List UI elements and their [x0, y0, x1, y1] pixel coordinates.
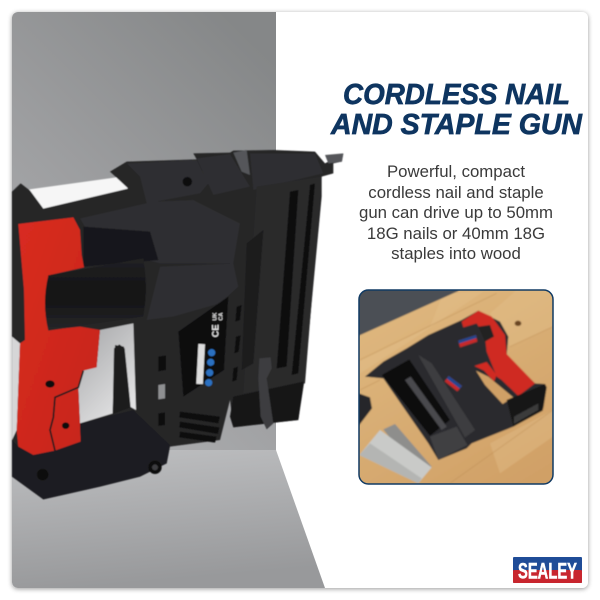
battery base — [507, 384, 547, 427]
handle screw holes — [45, 380, 69, 429]
staple strips — [359, 424, 432, 483]
head logo badge — [458, 335, 477, 347]
bench hole — [515, 321, 521, 326]
dark groove — [83, 227, 158, 267]
product image: nail gun — [12, 150, 343, 499]
magazine channel — [382, 359, 450, 436]
inset border — [359, 290, 553, 484]
hole on head — [183, 177, 192, 186]
red handle — [17, 217, 100, 455]
description text: cordless nail and staple — [368, 183, 544, 202]
gap between handle and body — [78, 323, 136, 423]
barrel — [45, 258, 146, 331]
description text: Powerful, compact — [387, 162, 525, 181]
dark display panel — [478, 325, 494, 342]
gun silhouette — [12, 150, 343, 499]
magazine foot — [230, 382, 303, 427]
specification label plate: UK — [213, 312, 219, 321]
body side slots — [158, 305, 242, 426]
body logo badge — [445, 376, 462, 391]
gun body — [365, 311, 547, 460]
plank lines — [361, 298, 550, 415]
clamp lever — [258, 357, 273, 429]
release lever on head — [233, 150, 250, 175]
red top housing — [462, 311, 535, 396]
wooden workbench — [357, 287, 557, 487]
vent slits — [179, 412, 220, 443]
white battery-top bar — [29, 177, 127, 209]
description text: staples into wood — [391, 244, 521, 263]
handle seam — [50, 371, 83, 451]
dark wall background — [360, 290, 459, 336]
nose block — [430, 427, 467, 460]
magazine — [242, 177, 322, 393]
trigger guard stem — [113, 344, 131, 414]
battery foot — [12, 410, 170, 499]
handle opening — [476, 371, 513, 404]
title: AND STAPLE GUN — [330, 109, 583, 141]
title: CORDLESS NAIL — [343, 79, 570, 111]
description text — [359, 162, 553, 263]
description text: 18G nails or 40mm 18G — [367, 224, 545, 243]
specification label plate: CA — [218, 312, 224, 321]
description text: gun can drive up to 50mm — [359, 203, 553, 222]
title — [330, 79, 583, 141]
inset photo: gun on workbench — [357, 287, 557, 487]
panel: grey product backdrop — [12, 12, 325, 588]
light reflection left of handle — [12, 337, 21, 440]
side strip — [418, 355, 475, 437]
head facets — [80, 153, 323, 320]
lighter plank patches — [490, 292, 552, 472]
specification label plate — [178, 297, 228, 397]
specification label plate: CE — [210, 324, 220, 337]
red trigger — [474, 362, 497, 382]
battery at left — [360, 392, 373, 426]
top nozzle tip — [325, 153, 343, 163]
